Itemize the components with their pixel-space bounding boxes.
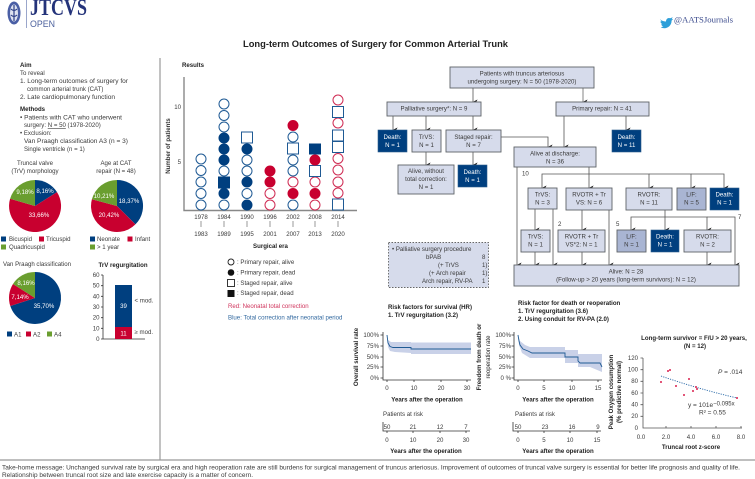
pie chart: age at repair: repair (N = 48) xyxy=(96,168,136,175)
branch labels: 5 xyxy=(616,221,620,228)
panel: palliative surgery procedure: 1 xyxy=(482,278,486,285)
dot chart: patients by surgical era: 5 xyxy=(178,159,182,166)
box: primary repair: Primary repair: N = 41 xyxy=(572,106,632,112)
scatter plot: peak oxygen consumption: 120 xyxy=(628,355,639,362)
table: patients at risk, reoperation: 9 xyxy=(596,424,600,431)
legend: dot chart: Red: Neonatal total correction xyxy=(228,303,309,310)
scatter plot: peak oxygen consumption: P = .014 xyxy=(718,369,743,376)
box: TrVS 1: N = 1 xyxy=(419,142,434,149)
box: alive without correction xyxy=(398,165,454,194)
pie chart: truncal valve morphology: 33,66% xyxy=(29,212,50,219)
pie chart: truncal valve morphology: Bicuspid xyxy=(9,236,32,243)
panel: palliative surgery procedure: (+ Arch repair xyxy=(429,270,466,277)
pie chart: van praagh classification xyxy=(3,261,71,338)
bar chart: TrV regurgitation: 50 xyxy=(93,283,100,290)
box: TrVS 3 xyxy=(528,188,557,209)
bar chart: TrV regurgitation: 39 xyxy=(120,303,127,310)
scatter plot: peak oxygen consumption: 20 xyxy=(631,413,639,420)
box: palliative surgery xyxy=(387,102,481,116)
box: TrVS 3: N = 3 xyxy=(535,200,550,206)
flowchart xyxy=(378,67,742,286)
chart: overall survival: 10 xyxy=(411,385,418,392)
bar chart: TrV regurgitation: 30 xyxy=(93,304,100,311)
heading: reoperation risk factors: Risk factor for death or reoperation xyxy=(518,300,621,307)
branch labels xyxy=(558,214,742,228)
panel: palliative surgery procedure: • Palliative surgery procedure xyxy=(392,246,472,253)
dot chart: patients by surgical era: Number of patients xyxy=(165,118,172,174)
column 2014-2020 xyxy=(331,95,345,238)
bar chart: TrV regurgitation xyxy=(93,262,154,343)
box: alive without correction: Alive, without xyxy=(408,168,444,175)
journal logo xyxy=(8,0,87,30)
box: death 11: N = 11 xyxy=(618,142,636,149)
scatter plot: peak oxygen consumption: 6.0 xyxy=(712,434,721,441)
branch labels: 2 xyxy=(558,221,562,228)
panel: palliative surgery procedure: bPAB xyxy=(426,254,441,261)
box: RVOTR + Tr VS xyxy=(566,188,612,210)
panel: aim and methods: 1. Long-term outcomes of surgery for xyxy=(20,78,128,85)
panel: aim and methods: Methods xyxy=(20,106,46,113)
panel: aim and methods: Aim xyxy=(20,62,32,69)
branch labels: 7 xyxy=(738,214,742,221)
bar chart: TrV regurgitation: 11 xyxy=(120,330,127,338)
column 2014-2020: 2014 xyxy=(331,214,345,221)
column 1996-2001: 2001 xyxy=(263,231,277,238)
pie chart: age at repair: Infant xyxy=(135,236,151,243)
box: RVOTR + Tr VS second: VS*2: N = 1 xyxy=(565,242,598,248)
box: death after discharge xyxy=(710,188,739,210)
box: death after staged: Death: xyxy=(464,169,482,176)
connectors xyxy=(393,88,735,265)
panel: aim and methods: • Patients with CAT who underwent xyxy=(20,114,122,122)
scatter plot: peak oxygen consumption: 40 xyxy=(631,402,639,408)
box: alive at discharge: Alive at discharge: xyxy=(530,150,580,158)
box: alive without correction: total correction: xyxy=(405,176,447,183)
chart: freedom from death or reoperation: 15 xyxy=(595,385,602,392)
box: death after discharge: N = 1 xyxy=(717,200,732,206)
title: Long-term Outcomes of Surgery for Common Arterial Trunk xyxy=(243,39,509,49)
chart: freedom from death or reoperation: 25% xyxy=(499,364,512,371)
bar chart: TrV regurgitation: ≥ mod. xyxy=(134,329,153,336)
column 2008-2013 xyxy=(308,144,322,238)
legend: dot chart xyxy=(228,259,342,322)
pie chart: truncal valve morphology: Quadricuspid xyxy=(9,244,45,251)
box: L/F 5 xyxy=(677,188,706,210)
chart: overall survival: Years after the operation xyxy=(391,396,463,404)
scatter plot: peak oxygen consumption: y = 101e xyxy=(688,402,713,409)
box: L/F 5: L/F: xyxy=(686,192,697,198)
box: staged repair xyxy=(446,130,501,152)
bar chart: TrV regurgitation: 10 xyxy=(93,325,100,332)
box: RVOTR 11: RVOTR: xyxy=(638,192,661,198)
chart: freedom from death or reoperation: 0 xyxy=(516,385,520,392)
box: alive final: Alive: N = 28 xyxy=(609,268,644,276)
twitter handle: @AATSJournals xyxy=(674,14,733,24)
scatter plot: peak oxygen consumption: (N = 12) xyxy=(684,343,706,350)
scatter plot: peak oxygen consumption: 8.0 xyxy=(737,434,746,441)
legend: dot chart: Blue: Total correction after neonatal period xyxy=(228,314,342,322)
box: alive without correction: N = 1 xyxy=(419,184,434,191)
heading: survival risk factors: Risk factors for survival (HR) xyxy=(388,304,472,311)
box: staged repair: N = 7 xyxy=(466,142,481,149)
panel: aim and methods: surgery: N = 50 (1978-2020) xyxy=(24,122,101,129)
pie chart: van praagh classification: A1 xyxy=(14,332,22,338)
table: patients at risk, survival: 21 xyxy=(410,424,417,431)
pie chart: age at repair: Age at CAT xyxy=(100,160,132,167)
chart: freedom from death or reoperation: 0 % xyxy=(500,375,512,382)
box: RVOTR + Tr VS second xyxy=(558,230,605,252)
pie chart: van praagh classification: 35,70% xyxy=(34,303,55,310)
chart: freedom from death or reoperation: 5 xyxy=(542,385,546,392)
column 2008-2013: 2013 xyxy=(308,231,322,238)
box: TrVS 1 xyxy=(412,130,441,152)
column 1978-1983: 1983 xyxy=(194,231,208,238)
scatter plot: peak oxygen consumption: −0.095x xyxy=(713,402,735,408)
table: patients at risk, reoperation: 0 xyxy=(516,437,520,444)
column 1996-2001 xyxy=(263,166,277,238)
scatter plot: peak oxygen consumption: 4.0 xyxy=(687,434,696,441)
box: RVOTR 11 xyxy=(626,188,672,210)
chart: overall survival: Overall survival rate xyxy=(353,327,360,386)
chart: freedom from death or reoperation: 10 xyxy=(569,385,576,392)
dot chart: patients by surgical era xyxy=(165,77,357,250)
box: patients: Patients with truncus arteriosus xyxy=(480,70,564,78)
box: death after RVOTR: N = 1 xyxy=(658,242,673,248)
column 1990-1995: 1995 xyxy=(240,231,254,238)
box: primary repair xyxy=(556,102,649,116)
box: death 11 xyxy=(612,130,641,152)
column 1996-2001: 1996 xyxy=(263,214,277,221)
box: RVOTR + Tr VS: RVOTR + Tr xyxy=(572,192,606,198)
chart: overall survival xyxy=(353,327,471,404)
chart: overall survival: 25% xyxy=(367,364,380,371)
box: TrVS 1: TrVS: xyxy=(419,134,434,141)
scatter plot: peak oxygen consumption: 60 xyxy=(631,390,639,397)
table: patients at risk, reoperation: 10 xyxy=(567,437,574,444)
pie chart: age at repair xyxy=(90,160,151,251)
column 1984-1989: 1989 xyxy=(217,231,231,238)
box: TrVS 3: TrVS: xyxy=(535,192,550,198)
journal logo: OPEN xyxy=(30,19,55,30)
box: death 1 xyxy=(378,130,407,152)
panel: aim and methods: common arterial trunk (CAT) xyxy=(27,86,103,93)
reoperation curve panel xyxy=(476,300,621,455)
scatter plot: peak oxygen consumption: R² = 0.55 xyxy=(699,410,726,416)
box: palliative surgery: Palliative surgery*: N = 9 xyxy=(401,106,468,112)
panel: aim and methods: 2. Late cardiopulmonary function xyxy=(20,94,115,101)
results heading: Results xyxy=(182,62,205,69)
panel: aim and methods xyxy=(20,62,128,153)
bar chart: TrV regurgitation: TrV regurgitation xyxy=(98,262,148,269)
pie chart: truncal valve morphology xyxy=(1,160,70,251)
chart: overall survival: 100% xyxy=(363,332,380,339)
box: death after RVOTR: Death: xyxy=(656,234,674,240)
chart: freedom from death or reoperation: 75% xyxy=(499,343,512,350)
survival curve panel xyxy=(353,304,472,455)
legend: dot chart: : Staged repair, alive xyxy=(237,280,293,287)
panel: palliative surgery procedure: Arch repair, RV-PA xyxy=(422,278,474,285)
column 2002-2007: 2002 xyxy=(286,214,300,221)
table: patients at risk, survival: 12 xyxy=(437,424,444,431)
pie chart: truncal valve morphology: 8,16% xyxy=(36,188,54,195)
scatter plot: peak oxygen consumption xyxy=(608,335,747,451)
table: patients at risk, survival xyxy=(383,411,470,455)
bar chart: TrV regurgitation: < mod. xyxy=(134,298,154,304)
table: patients at risk, reoperation: Years after the operation xyxy=(522,448,594,455)
panel: aim and methods: • Exclusion: xyxy=(20,130,52,137)
scatter plot: peak oxygen consumption: 0 xyxy=(635,425,639,432)
table: patients at risk, survival: 20 xyxy=(437,437,444,444)
legend: dot chart: : Primary repair, dead xyxy=(237,270,295,276)
chart: overall survival: 20 xyxy=(438,385,445,392)
column 1984-1989: 1984 xyxy=(217,214,231,221)
twitter handle xyxy=(660,14,733,28)
box: RVOTR 11: N = 11 xyxy=(640,200,658,206)
column 1978-1983 xyxy=(194,154,208,238)
pie chart: age at repair: 20,42% xyxy=(99,212,120,219)
box: staged repair: Staged repair: xyxy=(454,134,493,141)
table: patients at risk, reoperation: Patients at risk xyxy=(515,411,556,418)
table: patients at risk, reoperation: 50 xyxy=(515,424,522,431)
take-home message xyxy=(2,464,740,479)
panel: aim and methods: Van Praagh classification A3 (n = 3) xyxy=(24,138,128,145)
bar chart: TrV regurgitation: 0 xyxy=(96,336,100,343)
pie chart: age at repair: 10,21% xyxy=(94,193,115,200)
pie chart: van praagh classification: A2 xyxy=(33,332,41,338)
box: TrVS second xyxy=(521,230,550,252)
box: death after staged: N = 1 xyxy=(465,177,480,184)
scatter plot: peak oxygen consumption: 80 xyxy=(631,378,639,385)
legend: dot chart: : Staged repair, dead xyxy=(237,290,294,297)
pie chart: van praagh classification: A4 xyxy=(54,332,62,338)
box: RVOTR + Tr VS second: RVOTR + Tr xyxy=(565,234,598,240)
scatter plot: peak oxygen consumption: Truncal root z-score xyxy=(662,444,721,451)
pie chart: truncal valve morphology: (TrV) morphology xyxy=(11,168,60,175)
table: patients at risk, reoperation: 16 xyxy=(569,424,576,431)
panel: palliative surgery procedure: 1) xyxy=(482,270,487,277)
table: patients at risk, reoperation: 23 xyxy=(542,424,549,431)
chart: overall survival: 0 xyxy=(385,385,389,392)
panel: palliative surgery procedure xyxy=(388,242,488,288)
pie chart: age at repair: Neonate xyxy=(97,236,121,243)
panel: palliative surgery procedure: (+ TrVS xyxy=(438,262,459,269)
box: RVOTR 2: RVOTR: xyxy=(696,234,719,240)
box: alive final xyxy=(514,265,739,286)
column 2008-2013: 2008 xyxy=(308,214,322,221)
heading: reoperation risk factors: 1. TrV regurgitation (3.6) xyxy=(518,308,588,315)
scatter plot: peak oxygen consumption: 0.0 xyxy=(637,434,646,441)
chart: freedom from death or reoperation: reoperation rate xyxy=(485,335,492,379)
chart: overall survival: 0% xyxy=(370,375,380,382)
column 2002-2007 xyxy=(286,120,300,238)
scatter plot: peak oxygen consumption: Peak Oxygen cosumption xyxy=(608,354,615,429)
box: death after discharge: Death: xyxy=(716,192,734,198)
scatter plot: peak oxygen consumption: 2.0 xyxy=(662,434,671,441)
table: patients at risk, reoperation: 15 xyxy=(594,437,601,444)
box: death after staged xyxy=(458,165,487,187)
box: L/F 5: N = 5 xyxy=(684,200,699,206)
chart: freedom from death or reoperation: 100% xyxy=(495,332,512,339)
table: patients at risk, reoperation: 5 xyxy=(542,437,546,444)
table: patients at risk, survival: 7 xyxy=(464,424,468,431)
table: patients at risk, survival: 0 xyxy=(385,437,389,444)
take-home message: Relationship between truncal root size and late exercise capacity is a matter of concern. xyxy=(2,472,253,479)
panel: aim and methods: Single ventricle (n = 1) xyxy=(24,146,85,153)
bar chart: TrV regurgitation: 20 xyxy=(93,315,100,322)
box: death 11: Death: xyxy=(618,134,636,141)
box: L/F 1: L/F: xyxy=(626,234,637,240)
box: death after RVOTR xyxy=(651,230,679,252)
heading: reoperation risk factors: 2. Using conduit for RV-PA (2.0) xyxy=(518,316,609,323)
pie chart: van praagh classification: Van Praagh classification xyxy=(3,261,71,268)
dot chart: patients by surgical era: Surgical era xyxy=(253,243,289,250)
chart: freedom from death or reoperation: Years after the operation xyxy=(522,396,594,404)
box: alive at discharge xyxy=(514,147,596,167)
chart: freedom from death or reoperation: Freedom from death or xyxy=(476,323,483,390)
box: RVOTR 2: N = 2 xyxy=(700,242,715,248)
column 1990-1995: 1990 xyxy=(240,214,254,221)
bar chart: TrV regurgitation: 60 xyxy=(93,272,100,279)
table: patients at risk, survival: Patients at risk xyxy=(383,411,424,418)
panel: aim and methods: To reveal xyxy=(20,70,45,77)
pie chart: van praagh classification: 8,16% xyxy=(17,280,35,287)
chart: overall survival: 50% xyxy=(367,354,380,361)
pie chart: age at repair: 18,37% xyxy=(119,198,140,205)
table: patients at risk, reoperation xyxy=(513,411,601,455)
pie chart: van praagh classification: 7,14% xyxy=(11,294,29,301)
box: TrVS second: N = 1 xyxy=(528,242,543,248)
bar chart: TrV regurgitation: 40 xyxy=(93,293,100,300)
table: patients at risk, survival: 30 xyxy=(463,437,470,444)
scatter plot: peak oxygen consumption: (% predictive normal) xyxy=(616,361,623,423)
panel: palliative surgery procedure: 1) xyxy=(482,262,487,269)
box: patients xyxy=(450,67,594,88)
label: 10: 10 xyxy=(522,170,529,178)
chart: freedom from death or reoperation xyxy=(476,323,602,404)
panel: palliative surgery procedure: 8 xyxy=(482,254,486,261)
chart: overall survival: 75% xyxy=(367,343,380,350)
take-home message: Take-home message: Unchanged survival rate by surgical era and high reoperation rate are still burdens for surgical management of truncus arteriosus. Improvement of outcomes of truncal valve surgery is essential for better life prognosis and quality of life. xyxy=(2,464,740,472)
pie chart: age at repair: > 1 year xyxy=(97,244,119,251)
pie chart: truncal valve morphology: Tricuspid xyxy=(46,236,70,243)
box: death 1: N = 1 xyxy=(385,142,400,149)
box: alive final: (Follow-up > 20 years (long-term survivors): N = 12) xyxy=(556,276,696,284)
column 2014-2020: 2020 xyxy=(331,231,345,238)
box: L/F 1: N = 1 xyxy=(624,242,639,248)
chart: freedom from death or reoperation: 50% xyxy=(499,354,512,361)
chart: overall survival: 30 xyxy=(464,385,471,392)
heading: survival risk factors xyxy=(388,304,472,319)
box: alive at discharge: N = 36 xyxy=(546,158,565,166)
column 2002-2007: 2007 xyxy=(286,231,300,238)
scatter plot: peak oxygen consumption: 100 xyxy=(628,366,639,374)
table: patients at risk, survival: 50 xyxy=(384,424,391,431)
box: patients: undergoing surgery: N = 50 (1978-2020) xyxy=(468,78,576,86)
heading: survival risk factors: 1. TrV regurgitation (3.2) xyxy=(388,312,458,319)
box: death 1: Death: xyxy=(384,134,402,141)
box: RVOTR + Tr VS: VS: N = 6 xyxy=(576,200,603,206)
column 1990-1995 xyxy=(240,132,254,238)
column 1984-1989 xyxy=(217,99,231,238)
legend: dot chart: : Primary repair, alive xyxy=(237,259,295,266)
pie chart: truncal valve morphology: Truncal valve xyxy=(17,160,54,167)
column 1978-1983: 1978 xyxy=(194,214,208,221)
box: TrVS second: TrVS: xyxy=(528,234,543,240)
pie chart: truncal valve morphology: 9,18% xyxy=(16,189,34,196)
heading: reoperation risk factors xyxy=(518,300,621,323)
table: patients at risk, survival: 10 xyxy=(410,437,417,444)
box: RVOTR 2 xyxy=(684,230,731,252)
dot chart: patients by surgical era: 10 xyxy=(174,104,182,111)
box: L/F 1 xyxy=(617,230,646,252)
table: patients at risk, survival: Years after the operation xyxy=(390,448,462,455)
scatter plot: peak oxygen consumption: Long-term survivor = F/U > 20 years, xyxy=(641,335,747,342)
